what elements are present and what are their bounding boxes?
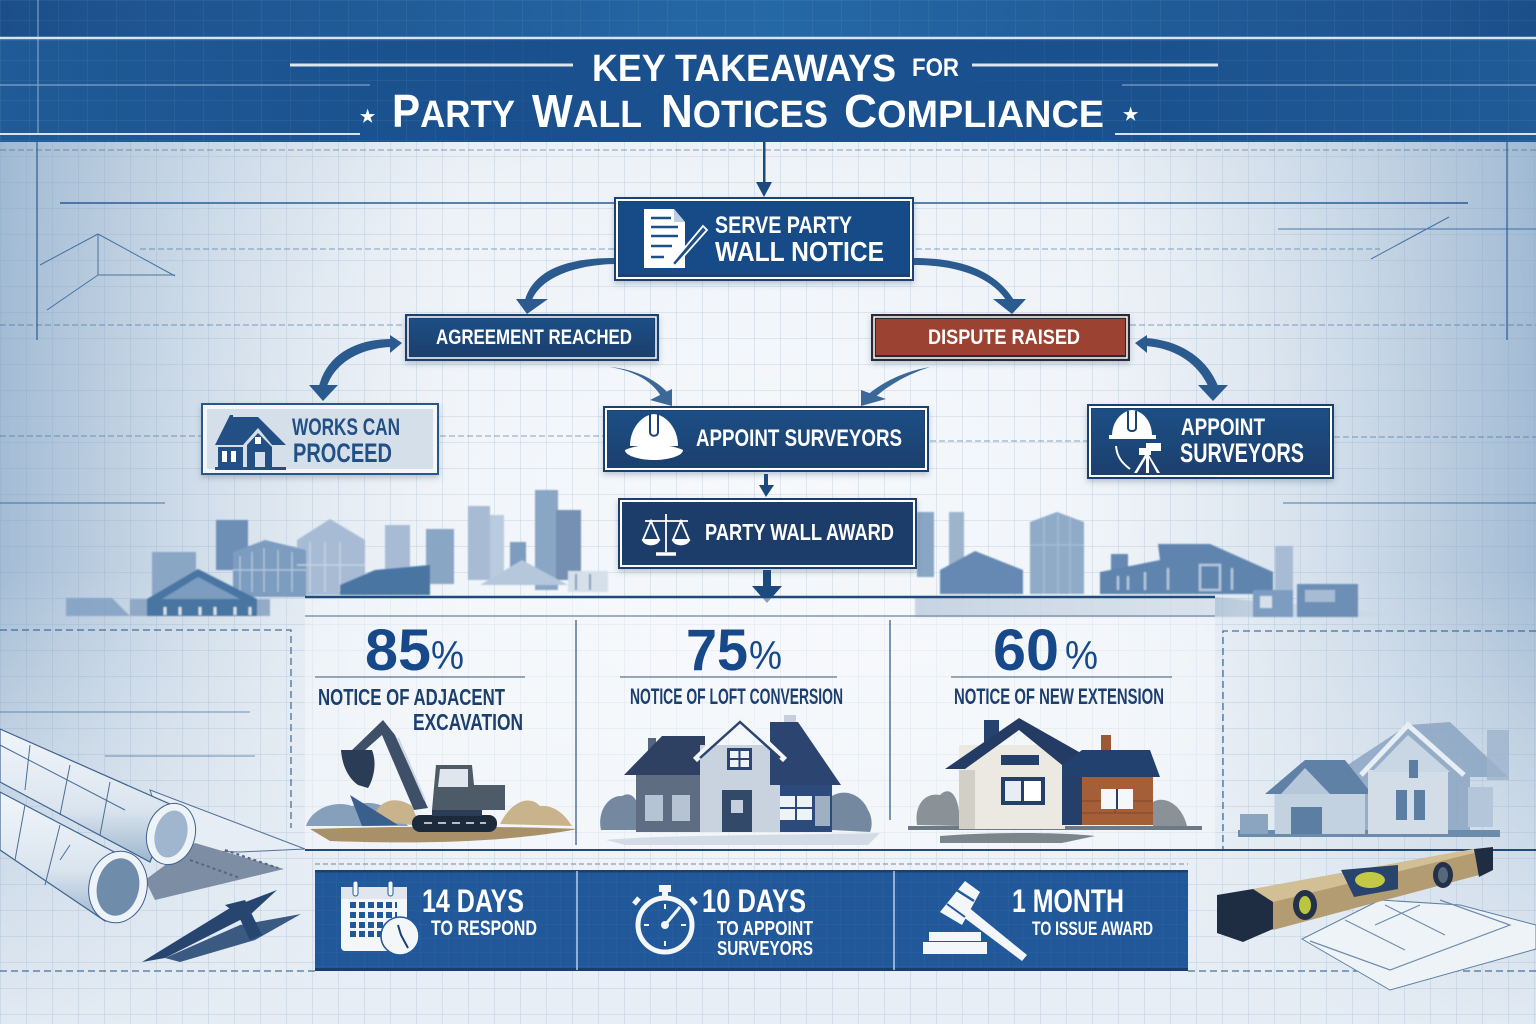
illustration: house new extension (908, 718, 1202, 843)
title: COMPLIANCE (844, 85, 1104, 137)
panel: timeframes bar: TO ISSUE AWARD (1032, 919, 1153, 940)
title (290, 48, 1218, 137)
box: works can proceed: WORKS CAN (292, 414, 400, 441)
panel: timeframes bar: TO RESPOND (431, 917, 537, 940)
box: party wall award (618, 498, 917, 569)
box: appoint surveyors centre (603, 406, 929, 472)
box: appoint surveyors right (1087, 404, 1334, 479)
header band (0, 0, 1536, 142)
stat: 60 percent: 60 (993, 618, 1059, 683)
title: KEY TAKEAWAYS (592, 48, 896, 90)
icon: hard hat (625, 414, 683, 460)
stat: 85 percent: EXCAVATION (413, 709, 523, 735)
stat: 75 percent: NOTICE OF LOFT CONVERSION (630, 684, 843, 709)
icon: gavel (923, 881, 1027, 961)
box: dispute raised (871, 314, 1130, 361)
title: ★ (1123, 105, 1139, 124)
panel: timeframes bar: 1 MONTH (1012, 883, 1124, 919)
box: works can proceed (201, 403, 439, 475)
stat: 60 percent (951, 618, 1172, 709)
illustration: house loft conversion (600, 715, 880, 845)
illustration: faded houses (1238, 722, 1509, 837)
box: serve party wall notice: SERVE PARTY (715, 212, 852, 239)
arrow: serve to agreement (516, 258, 614, 314)
stat: 85 percent: 85 (365, 618, 431, 683)
icon: stopwatch (634, 885, 696, 952)
arrow: award to statistics (752, 570, 782, 603)
stat: 85 percent: NOTICE OF ADJACENT (318, 684, 505, 710)
skyline left (66, 490, 608, 616)
stat: 75 percent (620, 618, 843, 709)
stat: 75 percent: % (749, 634, 782, 678)
panel: timeframes bar: 10 DAYS (702, 883, 806, 919)
arrow: agreement to appoint (610, 367, 672, 406)
stat: 60 percent: NOTICE OF NEW EXTENSION (954, 684, 1164, 709)
illustration: blueprint rolls and ruler (0, 729, 305, 928)
title: FOR (912, 54, 959, 82)
arrow: surveyors to award (759, 474, 774, 497)
panel: timeframes bar (315, 864, 1188, 971)
arrow: header to serve notice (756, 142, 772, 197)
box: appoint surveyors right: SURVEYORS (1180, 438, 1304, 468)
box: agreement reached: AGREEMENT REACHED (436, 326, 632, 349)
box: appoint surveyors right: APPOINT (1181, 414, 1265, 441)
icon: document and pen (644, 209, 707, 268)
icon: house (215, 415, 286, 470)
panel: statistics background (305, 597, 1536, 850)
box: agreement reached (405, 314, 659, 361)
stat: 75 percent: 75 (686, 618, 748, 683)
arrow: dispute to right surveyors (1135, 335, 1228, 401)
panel: timeframes bar: TO APPOINT (717, 918, 813, 940)
icon: compass tools (142, 890, 301, 962)
skyline right (915, 512, 1430, 617)
box: party wall award: PARTY WALL AWARD (705, 519, 894, 545)
icon: surveyor hat and tripod (1109, 410, 1161, 473)
arrow: serve to dispute (914, 258, 1026, 314)
panel: timeframes bar: SURVEYORS (717, 938, 813, 960)
arrow: agreement to works (309, 335, 402, 401)
box: dispute raised: DISPUTE RAISED (928, 326, 1080, 349)
title: PARTY (392, 85, 515, 137)
box: serve party wall notice: WALL NOTICE (715, 236, 884, 267)
title: NOTICES (661, 85, 828, 137)
stat: 85 percent: % (431, 634, 464, 678)
box: appoint surveyors centre: APPOINT SURVEYORS (696, 425, 902, 452)
arrow: dispute to appoint (861, 367, 930, 406)
box: works can proceed: PROCEED (293, 438, 392, 468)
stat: 60 percent: % (1065, 634, 1098, 678)
box: serve party wall notice (614, 197, 914, 281)
title: WALL (532, 85, 642, 137)
illustration: spirit level on plan (1217, 847, 1536, 990)
panel: timeframes bar: 14 DAYS (422, 883, 524, 919)
illustration: excavator (306, 720, 578, 842)
icon: scales (643, 514, 689, 554)
stat: 85 percent (315, 618, 525, 735)
icon: calendar and clock (341, 881, 419, 955)
title: ★ (360, 107, 376, 126)
